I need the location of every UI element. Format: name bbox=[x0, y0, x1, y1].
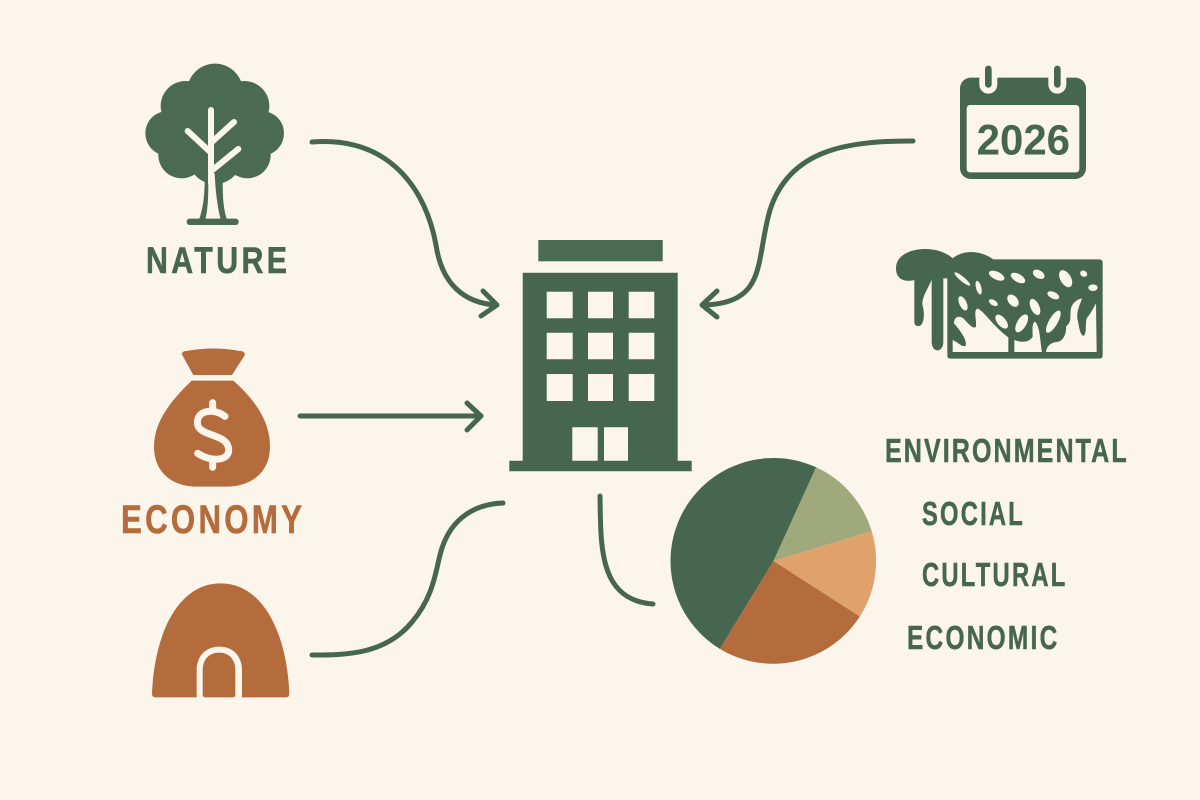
icon: money bag bbox=[154, 348, 270, 487]
slice: cultural bbox=[774, 531, 876, 616]
pie chart bbox=[670, 458, 876, 664]
slice: economic bbox=[720, 561, 860, 664]
icon: dripping moss panel bbox=[896, 249, 1103, 359]
icon: calendar 2026: 2026 bbox=[977, 116, 1070, 164]
label: SOCIAL: SOCIAL bbox=[922, 496, 1023, 533]
icon: central building bbox=[509, 240, 692, 471]
building body with windows and doors bbox=[509, 273, 692, 471]
label: ECONOMIC: ECONOMIC bbox=[907, 621, 1057, 657]
icon: igloo hut bbox=[152, 583, 289, 697]
icon: tree bbox=[145, 64, 284, 225]
connector: building to pie chart bbox=[600, 496, 653, 604]
arrow: economy to building bbox=[300, 403, 481, 430]
arrow: nature to building bbox=[312, 142, 497, 316]
label: ENVIRONMENTAL: ENVIRONMENTAL bbox=[885, 433, 1127, 470]
slice: environmental bbox=[670, 458, 816, 649]
slice: social bbox=[774, 467, 872, 561]
heading: NATURE: NATURE bbox=[146, 240, 287, 282]
building roof bar bbox=[538, 240, 663, 261]
arrow: hut to building bbox=[312, 503, 503, 655]
heading: ECONOMY: ECONOMY bbox=[121, 497, 302, 542]
icon: calendar 2026 bbox=[960, 66, 1086, 179]
arrow: calendar to building bbox=[702, 141, 913, 317]
label: CULTURAL: CULTURAL bbox=[922, 557, 1065, 594]
